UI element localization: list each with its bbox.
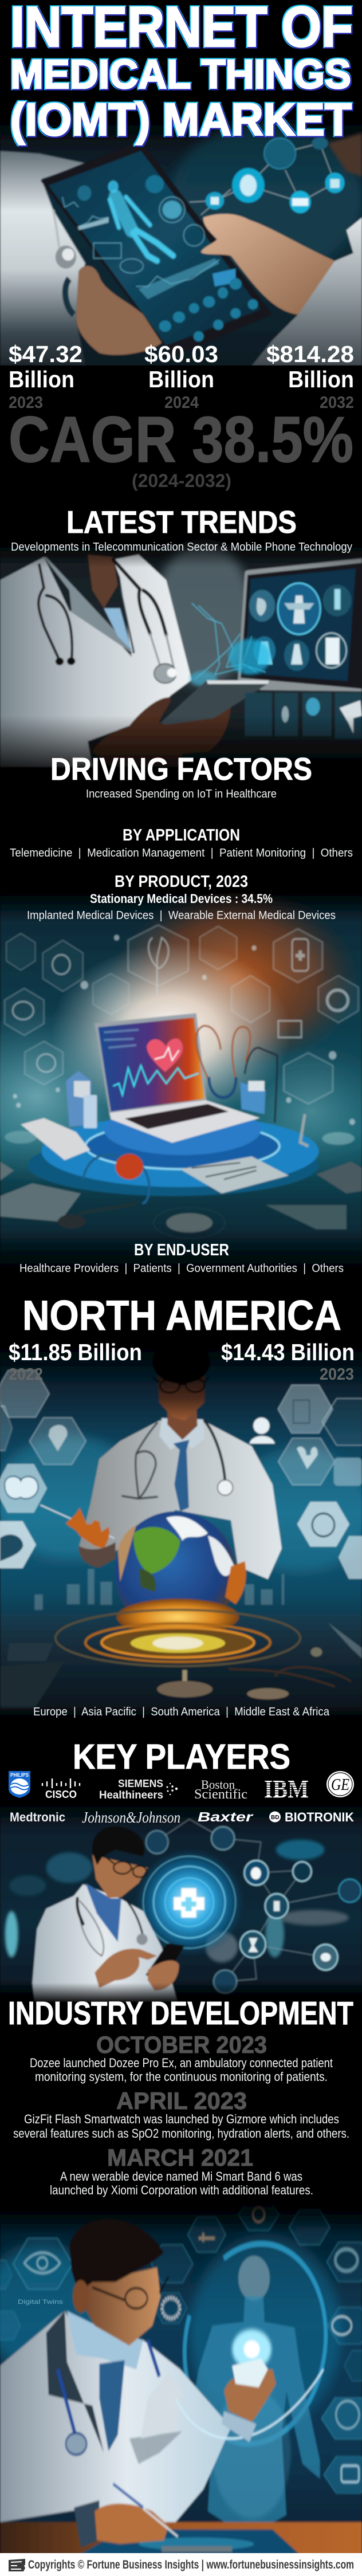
CAGR: (2024-2032) [132, 470, 231, 491]
logo: Cisco [42, 1778, 80, 1800]
image: doctor with phone and health network [0, 1801, 362, 2003]
glowing base rings [117, 1599, 239, 1635]
title: (IOMT) MARKET [10, 94, 352, 145]
title: MEDICAL THINGS [10, 52, 351, 97]
health hologram [134, 1847, 245, 1957]
doctor [0, 2311, 231, 2526]
translucent medical hexagons [5, 925, 359, 1104]
logo: Boston Scientific: Boston [201, 1777, 235, 1792]
stat: 2024: $60.03 [144, 341, 218, 367]
development: October 2023 [30, 2031, 333, 2084]
round platform [27, 1134, 318, 1196]
logo: Boston Scientific: Scientific [194, 1787, 247, 1802]
market size stats [9, 341, 354, 412]
segment: by end-user [19, 1241, 344, 1275]
connected nodes [157, 1819, 350, 1981]
stat: 2023: $47.32 [9, 341, 82, 367]
stat: 2024: Billion [148, 366, 214, 392]
logo: Biotronik: BIOTRONIK [285, 1810, 354, 1824]
segment: by product: Implanted Medical Devices | Wearable External Medical Devices [27, 909, 336, 922]
stat: 2023: Billion [9, 366, 74, 392]
stat: 2032: Billion [288, 366, 354, 392]
image: doctor holding IoMT tablet [0, 117, 362, 366]
stat: 2032 [266, 341, 354, 412]
desk [0, 2522, 362, 2555]
development: October 2023: OCTOBER 2023 [96, 2031, 267, 2058]
segment: by end-user: Healthcare Providers | Patients | Government Authorities | Others [19, 1262, 344, 1275]
logo: Boston Scientific [194, 1777, 247, 1802]
image: laptop with heart and medical icons [0, 889, 362, 1282]
stat: 2032: $814.28 [266, 341, 354, 367]
medical devices [66, 1071, 91, 1127]
city skyline [34, 1569, 284, 1610]
data hexagons [0, 2199, 362, 2493]
stethoscope [83, 1026, 277, 1203]
logo: IBM: IBM [264, 1775, 309, 1803]
development: October 2023: monitoring system, for the continuous monitoring of patients. [35, 2070, 328, 2084]
logo: Johnson & Johnson: Johnson&Johnson [82, 1809, 180, 1826]
key players heading: KEY PLAYERS [73, 1737, 290, 1776]
logo: Cisco: CISCO [45, 1789, 77, 1800]
segment: by product: Stationary Medical Devices : 34.5% [90, 892, 273, 906]
development: March 2021: A new werable device named Mi Smart Band 6 was [60, 2169, 302, 2184]
stethoscope [123, 1420, 225, 1499]
segment: by product: BY PRODUCT, 2023 [115, 873, 248, 891]
hologram ring and body [167, 2213, 344, 2475]
development: March 2021: launched by Xiomi Corporation with additional features. [50, 2183, 313, 2197]
segment: by application: BY APPLICATION [123, 826, 240, 845]
other regions: Europe | Asia Pacific | South America | Middle East & Africa [33, 1706, 330, 1718]
logo: Baxter: Baxter [198, 1809, 253, 1824]
logo: Biotronik: BD [271, 1815, 279, 1821]
north america stats [9, 1339, 355, 1384]
image: doctor with digital twin hologram [0, 2198, 362, 2555]
network nodes [190, 143, 335, 215]
driving factors heading: DRIVING FACTORS [50, 751, 312, 787]
logo: GE: GE [331, 1776, 349, 1794]
neural network glow [192, 603, 266, 680]
stethoscope [38, 560, 174, 667]
title [10, 0, 353, 145]
logo: Philips: PHILIPS [10, 1772, 29, 1778]
stat: 2023 [9, 341, 82, 412]
north america stats: $11.85 Billion [9, 1339, 142, 1365]
segment: by end-user: BY END-USER [134, 1241, 229, 1259]
globe [115, 1511, 236, 1634]
north america stats: 2023 [320, 1365, 354, 1384]
latest trends heading: LATEST TRENDS [66, 504, 297, 540]
large tablet [238, 559, 362, 692]
key player logos [9, 1771, 354, 1826]
stat: 2024: 2024 [164, 394, 199, 412]
logo: Medtronic: Medtronic [10, 1810, 65, 1824]
doctor [78, 1420, 282, 1579]
lower desk items [266, 1205, 347, 1229]
doctor [32, 1884, 178, 2003]
stat: 2032: 2032 [320, 394, 354, 412]
stat: 2024 [144, 341, 218, 412]
hologram body figure [109, 181, 173, 261]
logo: Siemens Healthineers: Healthineers [99, 1789, 163, 1801]
north america stats: 2022 [9, 1365, 43, 1384]
footer strip [0, 2553, 362, 2576]
image: doctor holding glowing globe [0, 1340, 362, 1720]
image: doctor with holographic tablet [0, 533, 362, 780]
desk and stand [183, 1670, 187, 1688]
development: April 2023: APRIL 2023 [116, 2087, 247, 2114]
hands with smartphone [95, 1949, 157, 1988]
logo: Siemens Healthineers: SIEMENS [118, 1778, 163, 1789]
stat: 2023: 2023 [9, 394, 43, 412]
development: March 2021 [50, 2144, 313, 2197]
development: April 2023 [13, 2087, 349, 2141]
raised hand [224, 2369, 276, 2422]
hand holding small tablet [92, 697, 231, 767]
logo: Siemens Healthineers [99, 1778, 178, 1801]
medical icon hexagons [0, 1371, 362, 1578]
laptop [95, 1013, 207, 1116]
icon: Fortune Business Insights logo [9, 2559, 25, 2571]
development: March 2021: MARCH 2021 [107, 2144, 253, 2171]
logo: Philips [9, 1771, 30, 1798]
segment: by application [10, 826, 353, 859]
hologram caption: Digital Twins: Digital Twins [18, 2299, 64, 2306]
lower data panels [245, 693, 362, 739]
driving factors text: Increased Spending on IoT in Healthcare [86, 788, 277, 800]
logo: GE [326, 1771, 354, 1797]
segment: by product [27, 873, 336, 922]
hand and pen [41, 1505, 115, 1538]
